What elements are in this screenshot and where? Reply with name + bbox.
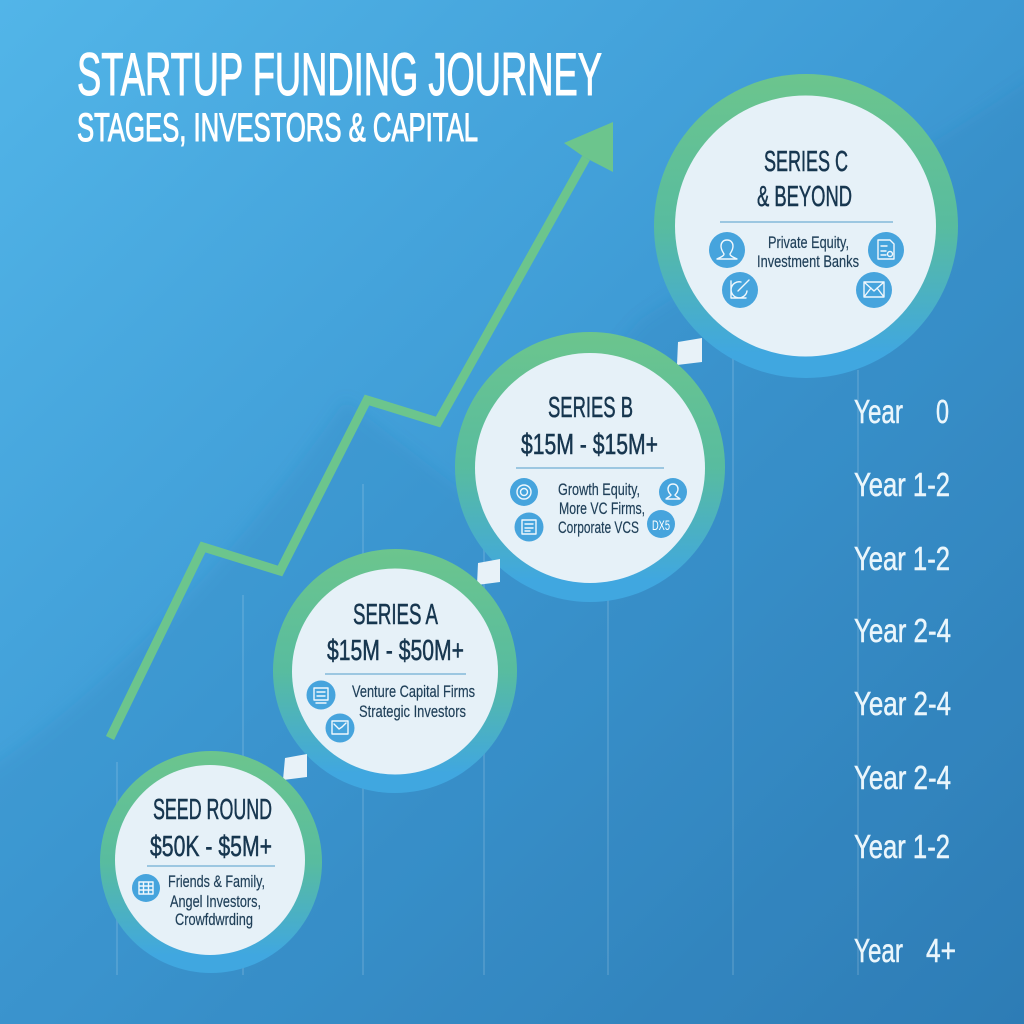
title: STAGES, INVESTORS & CAPITAL	[77, 106, 478, 150]
icon: globe grid	[132, 874, 160, 902]
heading: seed round: $50K - $5M+	[150, 831, 272, 863]
investors: seed round: Crowfdwrding	[175, 910, 253, 929]
panel: series b	[455, 332, 725, 602]
title: STARTUP FUNDING JOURNEY	[77, 41, 602, 108]
year timeline labels: Year 1-2	[854, 466, 950, 503]
icon: chart mail	[326, 714, 354, 742]
investors: series a	[352, 682, 475, 721]
icon: document	[868, 232, 904, 268]
icon: envelope	[856, 272, 892, 308]
heading: series c	[757, 146, 852, 213]
year timeline labels: Year 1-2	[854, 540, 950, 577]
year timeline labels: Year 2-4	[854, 685, 951, 722]
year timeline labels: Year 2-4	[854, 759, 951, 796]
timeline guide lines	[117, 340, 858, 975]
heading: series b: SERIES B	[548, 392, 633, 424]
heading: seed round: SEED ROUND	[153, 794, 272, 826]
heading: series b: $15M - $15M+	[521, 429, 658, 461]
panel: series c and beyond	[654, 74, 958, 378]
investors: series c: Investment Banks	[757, 252, 859, 271]
connector: seed to a	[283, 754, 307, 780]
investors: series c	[757, 233, 859, 271]
investors: seed round: Friends & Family,	[168, 872, 265, 891]
heading: series a: $15M - $50M+	[327, 635, 464, 667]
heading: series a: SERIES A	[353, 599, 438, 631]
icon: advisor	[659, 478, 687, 506]
panel: series a	[273, 549, 517, 793]
investors: series b: Growth Equity,	[558, 480, 640, 499]
heading: seed round	[150, 794, 272, 863]
year timeline labels: Year 2-4	[854, 612, 951, 649]
year timeline labels: Year 1-2	[854, 828, 950, 865]
investors: series b: Corporate VCS	[558, 518, 639, 537]
heading: series c: SERIES C	[764, 146, 848, 178]
panel: seed round	[100, 751, 322, 973]
investors: series b: More VC Firms,	[559, 499, 645, 518]
heading: series c: & BEYOND	[757, 181, 852, 213]
connector: b to c	[677, 338, 702, 365]
investors: series c: Private Equity,	[768, 233, 849, 252]
year timeline labels	[854, 393, 956, 969]
icon: exchange	[647, 510, 675, 538]
investors: seed round	[168, 872, 265, 929]
icon: person	[709, 232, 745, 268]
heading: series a	[327, 599, 464, 667]
title	[77, 41, 602, 150]
heading: series b	[521, 392, 658, 461]
investors: series a: Strategic Investors	[359, 702, 466, 721]
icon: screen	[306, 680, 336, 710]
icon: exchange: DX5	[652, 517, 670, 533]
year timeline labels: 0	[936, 393, 949, 430]
icon: target chart	[722, 272, 758, 308]
icon: report	[514, 512, 544, 542]
growth arrow	[110, 122, 613, 738]
investors: series b	[558, 480, 645, 537]
year timeline labels: Year	[854, 393, 903, 430]
investors: series a: Venture Capital Firms	[352, 682, 475, 701]
year timeline labels: 4+	[926, 932, 956, 969]
investors: seed round: Angel Investors,	[170, 892, 261, 911]
icon: gear	[510, 478, 538, 506]
year timeline labels: Year	[854, 932, 903, 969]
connector: a to b	[477, 559, 500, 585]
